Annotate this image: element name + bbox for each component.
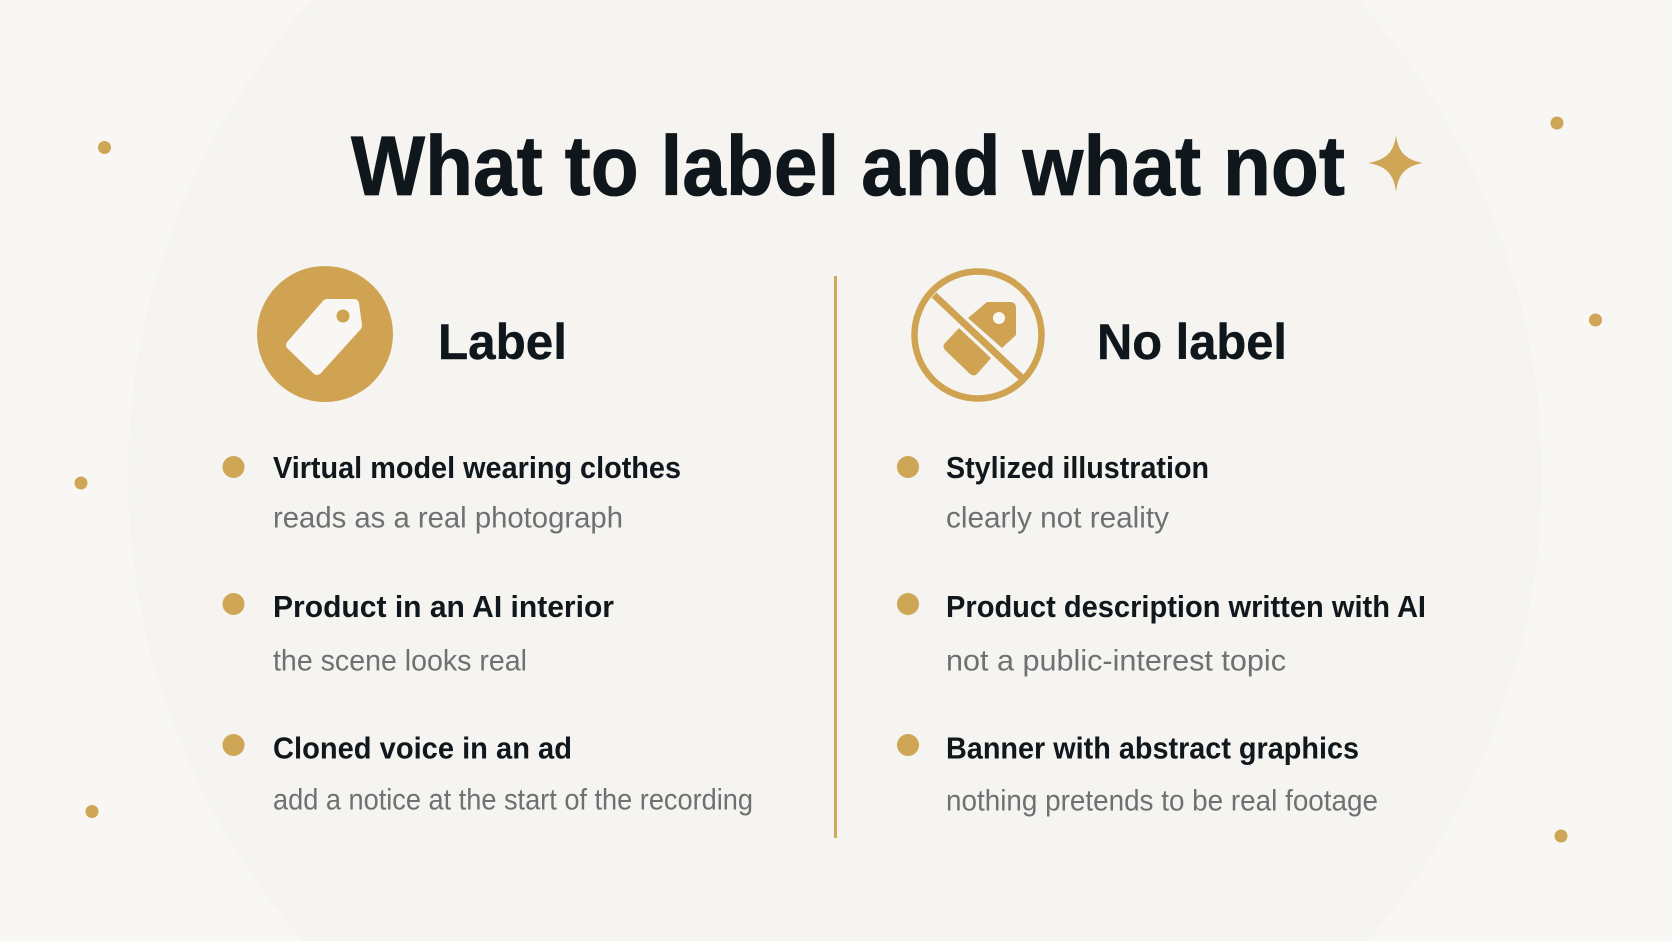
list item: banner: Banner with abstract graphics	[946, 730, 1359, 766]
list item: cloned voice: Cloned voice in an ad	[273, 730, 572, 766]
list item: virtual model: Virtual model wearing clothes	[273, 450, 681, 485]
list item: virtual model	[222, 450, 681, 534]
list item: banner: nothing pretends to be real footage	[946, 784, 1378, 818]
title: What to label and what not	[351, 119, 1345, 213]
list item: cloned voice	[222, 730, 753, 816]
heading: Label: Label	[438, 314, 567, 370]
list item: virtual model: reads as a real photograph	[273, 502, 623, 534]
list item: cloned voice: add a notice at the start of the recording	[273, 784, 753, 816]
heading: No label: No label	[1097, 314, 1287, 370]
icon: crossed-out tag	[914, 272, 1042, 398]
decorative dots	[74, 116, 1602, 842]
icon: tag in filled circle	[257, 266, 393, 402]
panel: label	[222, 266, 753, 816]
list item: product description	[897, 589, 1426, 678]
list item: product interior: the scene looks real	[273, 644, 527, 678]
list item: product description: not a public-interest topic	[946, 644, 1286, 678]
list item: stylized illustration: clearly not reality	[946, 502, 1169, 534]
list item: banner	[897, 730, 1378, 818]
divider	[834, 276, 837, 838]
list item: product interior: Product in an AI interior	[273, 589, 614, 624]
list item: stylized illustration: Stylized illustration	[946, 450, 1209, 485]
icon: sparkle	[1368, 135, 1423, 192]
list item: product interior	[222, 589, 614, 678]
list item: product description: Product description written with AI	[946, 589, 1426, 624]
panel: no label	[897, 272, 1426, 818]
list item: stylized illustration	[897, 450, 1209, 534]
